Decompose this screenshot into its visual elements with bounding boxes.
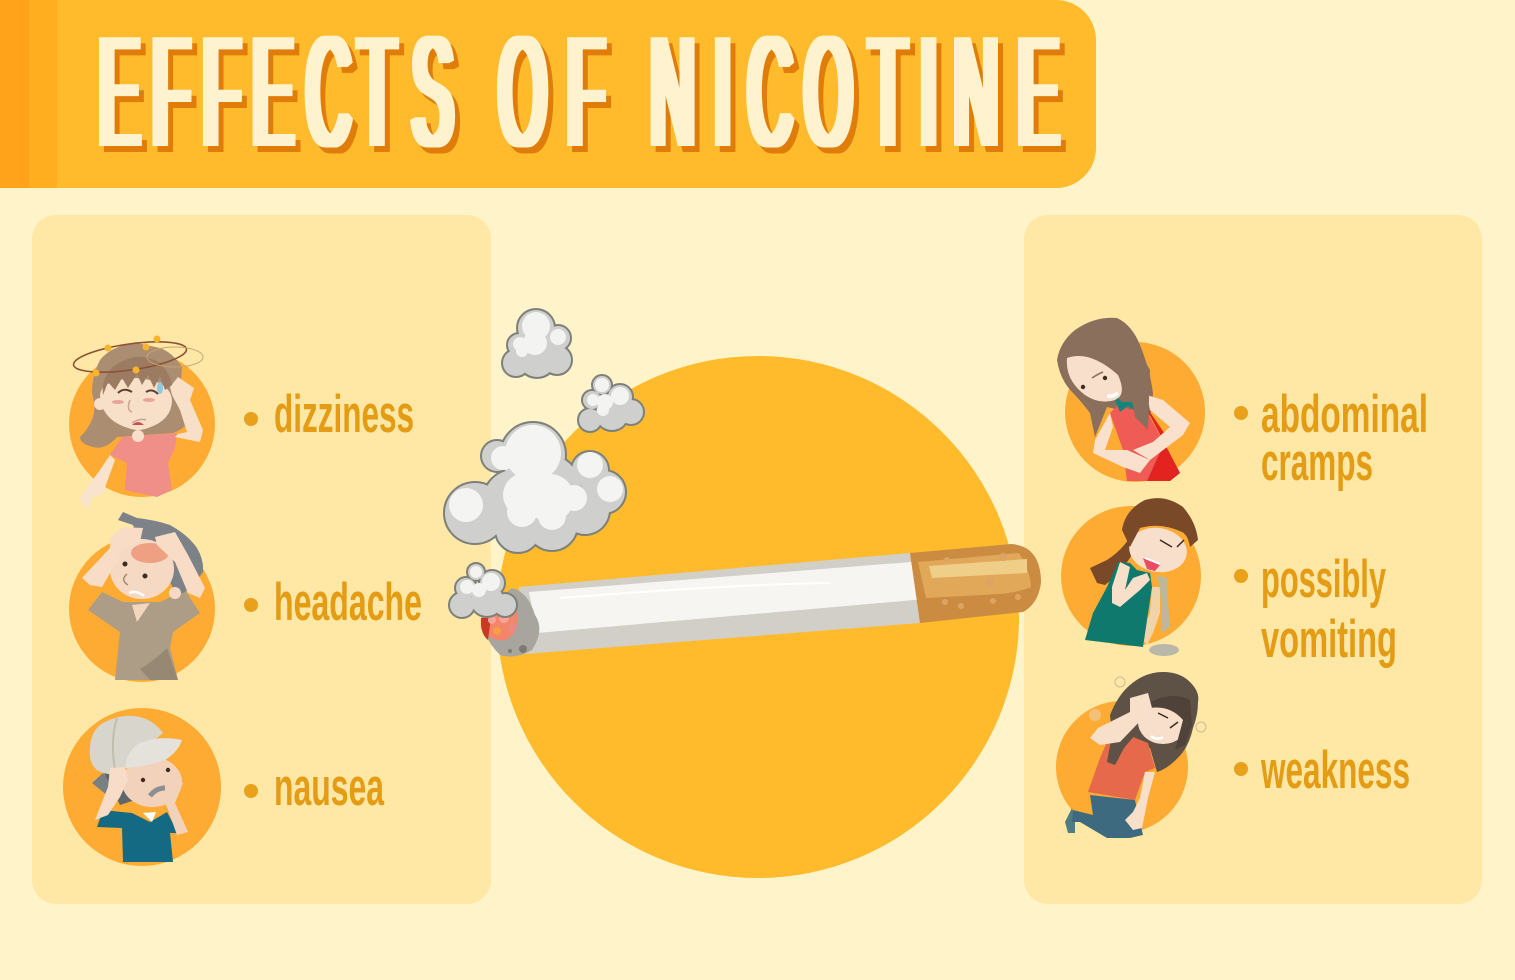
hands on head [82, 527, 143, 587]
shirt [97, 810, 178, 862]
right hand [160, 770, 188, 835]
shirt [88, 590, 200, 680]
face [1138, 700, 1188, 744]
jeans [1072, 795, 1143, 838]
label: nausea: nausea [274, 758, 384, 817]
label: dizziness: dizziness [274, 385, 414, 444]
hair back [80, 343, 188, 448]
cigarette paper [519, 553, 920, 654]
vomit stream [1157, 575, 1170, 633]
left arm [80, 455, 115, 510]
label: headache [244, 573, 422, 632]
face [110, 539, 174, 599]
right arm [170, 377, 203, 442]
smoke puff: at the tip [450, 564, 516, 617]
hair fringe [103, 357, 172, 395]
far arm [1137, 587, 1160, 645]
bow [1115, 398, 1134, 412]
face [100, 378, 172, 430]
smoke puff: large [445, 423, 625, 552]
label: possibly vomiting: possibly [1261, 550, 1386, 609]
label: possibly vomiting [1234, 550, 1397, 669]
hair [92, 773, 127, 803]
face [1126, 523, 1190, 577]
arms [1093, 413, 1150, 473]
left arm [95, 767, 128, 820]
person: weakness [1056, 672, 1206, 838]
cigarette filter [910, 544, 1041, 623]
person: possibly vomiting [1061, 498, 1201, 656]
hair [1057, 318, 1153, 437]
ponytail [1090, 533, 1133, 585]
label: weakness: weakness [1260, 741, 1410, 800]
lower arm [1125, 772, 1155, 830]
green dress [1085, 562, 1152, 647]
raised arm [1090, 693, 1152, 745]
near arm [1112, 562, 1150, 607]
label: headache: headache [274, 573, 422, 632]
icon: dizzy halo with stars [72, 336, 203, 378]
face [122, 757, 182, 807]
label: weakness [1234, 741, 1410, 800]
hair lock over shirt [1107, 715, 1135, 765]
header banner [0, 0, 1096, 188]
cap [90, 716, 163, 775]
panel: left symptoms [32, 215, 491, 904]
label: dizziness [244, 385, 414, 444]
label: abdominal cramps [1234, 385, 1428, 492]
label: possibly vomiting: vomiting [1261, 610, 1397, 669]
red dress [1110, 402, 1180, 481]
panel: right symptoms [1024, 215, 1482, 904]
smoke puff: top [503, 310, 571, 377]
central circle [497, 356, 1019, 878]
person: nausea [63, 708, 221, 866]
cigarette [481, 544, 1041, 657]
person: headache [69, 512, 215, 682]
face [1067, 356, 1122, 402]
burning ember [481, 588, 539, 657]
person: abdominal cramps [1057, 318, 1205, 482]
smoke puffs [445, 310, 643, 617]
hair [1122, 498, 1198, 547]
person: dizziness [69, 336, 215, 510]
grey hair [118, 512, 203, 595]
shirt [1088, 737, 1155, 800]
smoke puff: middle [579, 376, 643, 431]
hair [1107, 672, 1198, 772]
label: abdominal cramps: cramps [1261, 433, 1373, 492]
title: EFFECTS OF NICOTINE [99, 5, 1059, 180]
pink shirt [110, 433, 177, 497]
label: nausea [244, 758, 384, 817]
shoe [1065, 808, 1075, 833]
